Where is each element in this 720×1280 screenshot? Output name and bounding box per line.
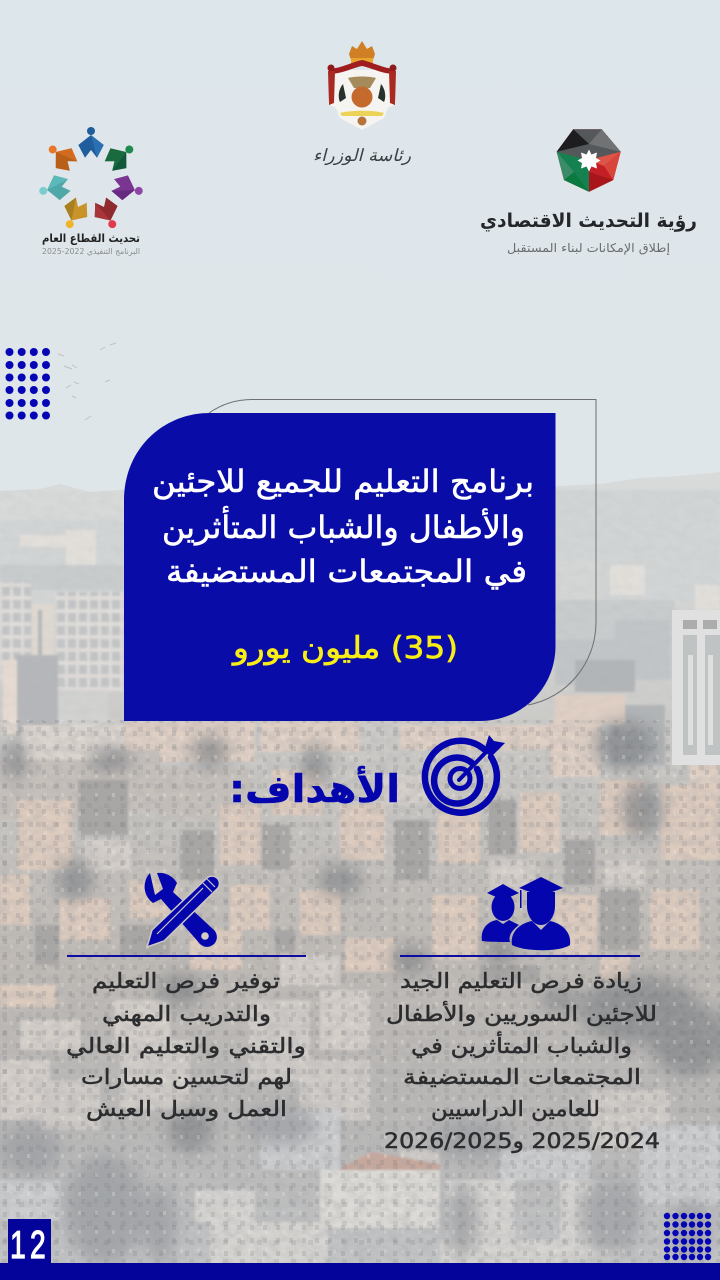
hillside house with red roof <box>320 1168 440 1228</box>
decorative birds <box>58 343 116 420</box>
logo name: تحديث القطاع العام <box>42 231 140 245</box>
objective: education access <box>384 877 660 1153</box>
icon: coat of arms <box>328 41 396 130</box>
objective text: للعامين الدراسيين <box>431 1097 600 1121</box>
white tower <box>672 610 720 765</box>
logo tagline: إطلاق الإمكانات لبناء المستقبل <box>507 241 670 255</box>
panel heading <box>152 464 534 590</box>
footer bar <box>0 1263 720 1280</box>
objective text: العمل وسبل العيش <box>86 1097 287 1121</box>
icon: target with arrow <box>425 735 505 813</box>
logo subtitle: البرنامج التنفيذي 2022-2025 <box>42 247 140 256</box>
funding amount: (35) مليون يورو <box>231 631 458 666</box>
dots: bottom right <box>664 1213 711 1260</box>
panel: programme title <box>124 400 596 721</box>
icon: seven people ring <box>37 127 145 233</box>
logo: coat of arms, prime ministry <box>313 41 412 166</box>
objective text: والتدريب المهني <box>102 1002 271 1026</box>
objective text: المجتمعات المستضيفة <box>403 1065 641 1089</box>
objective text: والشباب المتأثرين في <box>411 1031 632 1058</box>
panel heading: والأطفال والشباب المتأثرين <box>162 506 525 546</box>
dark trees and shadows <box>3 721 720 1152</box>
objective text: توفير فرص التعليم <box>92 969 280 994</box>
calligraphic name: رئاسة الوزراء <box>313 146 412 166</box>
objective text <box>384 969 660 1153</box>
divider line <box>400 955 640 957</box>
logo: public sector modernisation <box>37 127 145 256</box>
logo: economic modernisation vision <box>480 129 697 255</box>
objective text <box>66 969 306 1121</box>
heading: objectives: الأهداف: <box>229 765 400 811</box>
panel outline <box>209 400 596 705</box>
panel heading: برنامج التعليم للجميع للاجئين <box>152 464 534 500</box>
objective text: والتقني والتعليم العالي <box>66 1034 306 1059</box>
logo name: رؤية التحديث الاقتصادي <box>480 210 697 233</box>
objective text: 2025/2024 و2026/2025 <box>384 1129 660 1153</box>
icon: wrench and pencil <box>145 873 219 947</box>
objective: vocational <box>66 873 306 1121</box>
objective text: للاجئين السوريين والأطفال <box>386 1001 657 1026</box>
page number: 12 <box>10 1224 50 1267</box>
icon: heptagon with star <box>557 129 621 192</box>
objective text: لهم لتحسين مسارات <box>81 1065 292 1090</box>
objective text: زيادة فرص التعليم الجيد <box>400 969 642 994</box>
dots: top left <box>6 348 50 420</box>
divider line <box>67 955 306 957</box>
panel fill <box>124 413 556 721</box>
panel heading: في المجتمعات المستضيفة <box>166 554 527 590</box>
icon: two graduates <box>482 877 570 950</box>
